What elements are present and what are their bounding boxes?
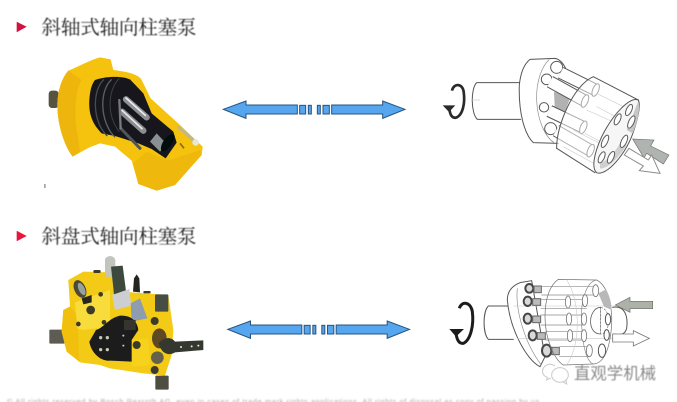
arrow: top double-headed [223, 101, 405, 118]
bullet: top section [17, 22, 27, 32]
upper-left coil [71, 278, 89, 300]
yellow housing [57, 57, 203, 191]
shaded recess [554, 92, 570, 112]
watermark: WeChat icon [543, 364, 568, 384]
cylinder block [545, 279, 612, 365]
grey port shading [598, 289, 612, 310]
bores [565, 285, 599, 357]
arrow: lower double-headed [228, 321, 409, 338]
diagram: swashplate pump line drawing [449, 279, 653, 367]
photo: swashplate pump cutaway [49, 256, 203, 390]
slipper ball heads [524, 284, 551, 357]
heading: swashplate axial piston pump: 斜盘式轴向柱塞泵 [42, 226, 196, 248]
light front plate [75, 290, 110, 330]
piston necks [533, 286, 559, 355]
watermark: account name: 直观学机械 [574, 365, 656, 383]
drive shaft [49, 330, 65, 344]
piston rods [541, 287, 593, 357]
bolts [76, 270, 159, 349]
piston rods [549, 73, 596, 151]
rotation arrow [456, 303, 473, 343]
black rotating group [89, 316, 138, 362]
top grey sensor [105, 256, 115, 277]
output shaft [613, 307, 627, 334]
rotation arrow [449, 85, 464, 118]
outlet arrow white [624, 148, 660, 173]
inlet arrow grey [615, 297, 653, 312]
outlet arrow white [613, 331, 649, 346]
pistons [119, 98, 147, 148]
inlet arrow grey [633, 139, 669, 164]
input shaft [472, 83, 521, 119]
yellow housing [62, 272, 173, 376]
valve ports [597, 103, 637, 164]
control lever [159, 338, 203, 354]
cylinder block [557, 77, 638, 173]
tilted flange [519, 58, 570, 143]
photo: bent-axis pump cutaway [44, 57, 203, 191]
black rotating group [89, 77, 177, 158]
heading: bent-axis axial piston pump: 斜轴式轴向柱塞泵 [42, 17, 196, 39]
input shaft [484, 306, 513, 339]
valve bolt [179, 127, 196, 143]
right control valve column [155, 294, 168, 312]
swash plate [507, 281, 545, 367]
face ports [598, 314, 611, 357]
bullet: lower section [17, 231, 27, 241]
pistons and ball heads [539, 61, 563, 135]
diagram: bent-axis pump line drawing [443, 58, 669, 173]
block end face [594, 100, 639, 173]
drive shaft splines [49, 91, 59, 108]
